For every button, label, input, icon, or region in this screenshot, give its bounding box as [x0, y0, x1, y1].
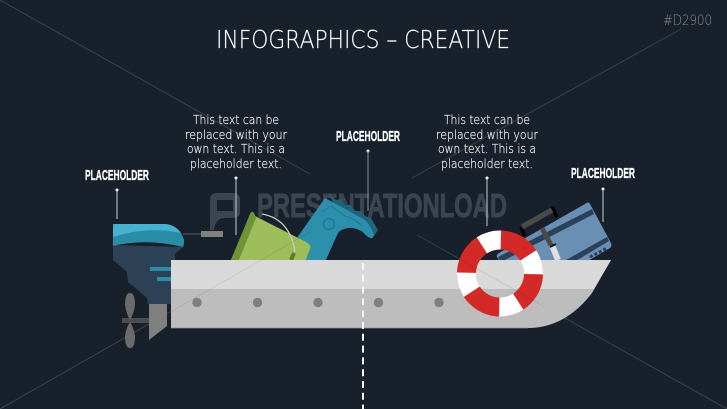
watermark: PresentationLoad: PRESENTATIONLOAD: [257, 187, 507, 224]
prop shaft: [122, 318, 149, 323]
dashed center line: [362, 263, 364, 409]
icon: outboard motor: [113, 224, 223, 348]
callout: right text block: [436, 113, 538, 226]
icon: life buoy: [466, 240, 534, 307]
callout: right placeholder label: [571, 166, 635, 222]
callout: center placeholder label: [336, 129, 400, 211]
propeller: [125, 293, 135, 348]
skeg: [149, 304, 167, 340]
boat hull: [171, 260, 611, 328]
throttle: [183, 233, 201, 235]
callout: center placeholder label: PLACEHOLDER: [336, 129, 400, 145]
icon: suitcase: [497, 202, 611, 298]
motor body: [113, 245, 183, 304]
color code label: #D2900: [663, 13, 712, 29]
callout: left placeholder label: PLACEHOLDER: [85, 168, 149, 184]
icon: green bag: [230, 212, 310, 262]
watermark: PresentationLoad: [210, 187, 507, 230]
callout: left text block: [185, 113, 287, 235]
callout: left text block: replaced with your: [185, 128, 287, 142]
callout: right text block: own text. This is a: [438, 142, 536, 156]
callout: right text block: This text can be: [444, 113, 530, 127]
callout: left placeholder label: [85, 168, 149, 219]
motor cowl: [113, 224, 184, 247]
callout: right text block: replaced with your: [436, 128, 538, 142]
icon: boot: [280, 193, 378, 262]
motor cowl highlight: [113, 224, 181, 237]
callout: right text block: placeholder text.: [441, 157, 533, 171]
motor vents: [150, 267, 172, 281]
title: INFOGRAPHICS – CREATIVE: [216, 25, 510, 54]
callout: left text block: This text can be: [193, 113, 279, 127]
callout: left text block: placeholder text.: [190, 157, 282, 171]
callout: right placeholder label: PLACEHOLDER: [571, 166, 635, 182]
callout: left text block: own text. This is a: [187, 142, 285, 156]
